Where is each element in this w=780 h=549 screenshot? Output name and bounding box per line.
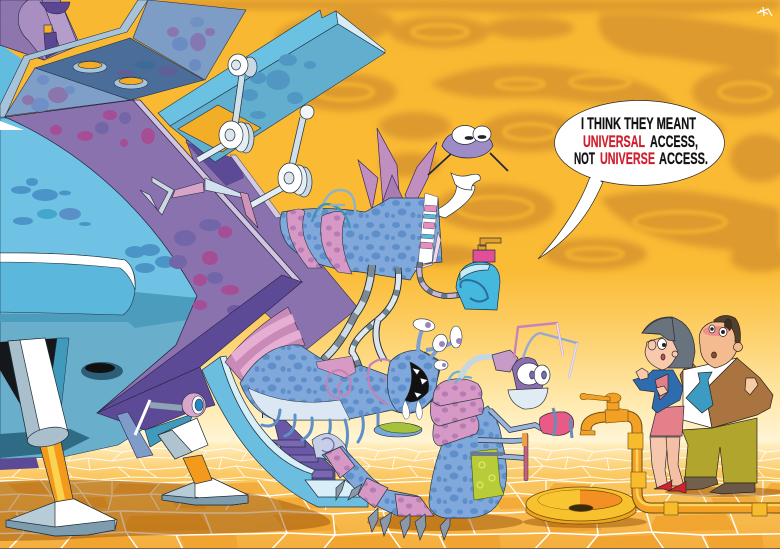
speech bubble: UNIVERSE — [600, 150, 655, 168]
blue main hull dome — [0, 118, 197, 340]
ground with cracked tiles — [0, 442, 780, 549]
tube legs of upper creature — [266, 262, 470, 418]
purple tail fin — [0, 0, 80, 60]
speech bubble: ACCESS. — [659, 150, 708, 168]
bottom edge line — [0, 548, 780, 549]
upper creature pink bands — [287, 209, 352, 274]
antennae — [514, 323, 577, 378]
yellow-green towel — [470, 449, 504, 500]
upper creature — [266, 126, 508, 418]
man's head — [699, 315, 742, 368]
robot head — [492, 350, 550, 409]
blue hull behind frame — [0, 44, 26, 125]
striped scarf — [414, 193, 441, 270]
sky swirl highlights — [317, 25, 771, 260]
hull window band — [0, 253, 135, 315]
lower hull hatch — [0, 429, 90, 470]
lower creature body — [429, 406, 507, 518]
man's tie — [686, 372, 713, 413]
arms with soap and toothbrush — [478, 408, 574, 481]
middle creature belly — [248, 388, 350, 420]
upper creature body — [280, 198, 442, 280]
middle creature — [240, 317, 462, 478]
lower creature — [322, 323, 577, 540]
speech bubble: UNIVERSAL — [583, 133, 645, 151]
dark wing edge — [185, 142, 244, 186]
gold sink — [526, 487, 636, 524]
hull spots — [11, 178, 175, 273]
lower creature shell — [430, 379, 484, 446]
ground shadows — [0, 480, 780, 541]
hull eye arm — [117, 393, 206, 458]
speech bubble: ACCESS, — [650, 133, 698, 151]
soap pump bottle — [456, 238, 501, 310]
woman — [633, 317, 695, 493]
left landing leg — [6, 338, 117, 536]
tail with claws — [322, 446, 450, 540]
middle creature little legs — [262, 410, 378, 450]
speech bubble: NOT — [574, 150, 595, 168]
dark hatch panel with holes — [35, 38, 204, 100]
mechanical rods and joints — [198, 54, 314, 206]
pale wing strip — [230, 155, 282, 218]
middle creature head — [387, 350, 440, 413]
hull frame — [0, 0, 148, 117]
man — [680, 315, 773, 494]
middle creature body — [240, 345, 442, 420]
upper creature hoops — [312, 190, 355, 228]
blue beam — [158, 10, 385, 162]
flying spider head — [428, 126, 508, 175]
woman's face — [642, 318, 678, 370]
spaceship — [0, 0, 385, 536]
upper creature neck and bone — [430, 173, 480, 218]
woman's hands — [636, 368, 668, 396]
hull highlight — [0, 121, 24, 130]
man's trousers and shoes — [682, 418, 757, 494]
middle creature spirals — [326, 359, 398, 405]
green soap bar — [374, 422, 422, 437]
right landing leg — [158, 418, 248, 505]
man's hand — [745, 378, 758, 395]
dark underside wing — [97, 275, 302, 447]
mechanical arm with claw — [140, 177, 258, 228]
hull oval vent — [81, 362, 123, 380]
pink neck stripe — [316, 356, 356, 378]
sky swirl clouds — [160, 0, 780, 272]
woman's legs and red shoes — [650, 437, 686, 493]
signature — [757, 7, 772, 16]
hull shading band — [0, 292, 197, 328]
drool drops — [402, 400, 422, 420]
dark hull opening — [0, 338, 69, 410]
woman's hair back — [642, 317, 695, 368]
eye stalks — [412, 317, 462, 370]
man's shirt — [683, 358, 737, 428]
pink striped tube — [225, 307, 305, 385]
swirl tail — [312, 434, 350, 478]
upper creature wings — [358, 128, 437, 215]
speech bubble — [538, 100, 724, 259]
upper hull panel — [133, 0, 246, 80]
lower hull panel — [5, 68, 130, 116]
neck tube — [460, 355, 510, 378]
mouth with teeth — [405, 362, 429, 402]
speech bubble: I THINK THEY MEANT — [581, 115, 696, 133]
man's jacket — [705, 358, 773, 428]
gold tap and pipe — [580, 393, 780, 516]
woman's top — [655, 374, 668, 400]
rear purple wing — [186, 140, 358, 350]
woman's skirt — [650, 406, 684, 436]
man's back jacket — [680, 360, 700, 400]
woman's jacket — [633, 370, 683, 413]
lower creature shell handles — [448, 372, 472, 384]
front purple wing — [5, 100, 302, 413]
curved blue stair with landing — [202, 356, 368, 507]
lower hull body — [0, 296, 197, 459]
